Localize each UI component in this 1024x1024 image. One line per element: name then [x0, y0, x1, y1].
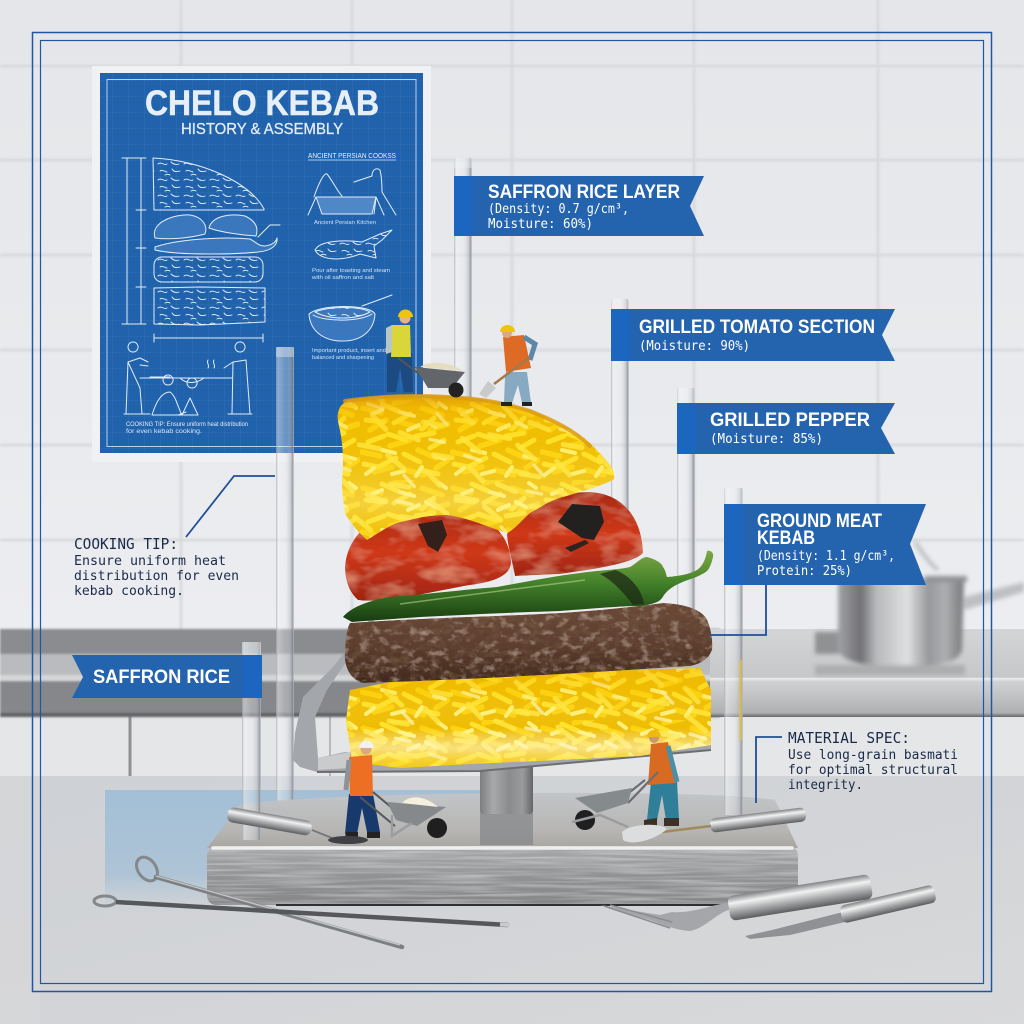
worker with wheelbarrow on base right — [572, 730, 679, 830]
worker with wheelbarrow on top rice — [386, 310, 465, 398]
ancient persian cooks sketches: ANCIENT PERSIAN COOKSS — [308, 151, 396, 160]
long skewer with ring diagonal — [132, 853, 402, 947]
cooking tip callout — [74, 535, 239, 599]
steel base platform — [207, 793, 798, 905]
ribbon: saffron rice layer: (Density: 0.7 g/cm³, — [488, 201, 629, 217]
glass measuring tube: rice layer — [454, 158, 472, 408]
cooking tip callout: Ensure uniform heat — [74, 553, 226, 569]
poster cooking tip caption: COOKING TIP: Ensure uniform heat distribution — [126, 421, 248, 428]
second skewer horizontal — [94, 896, 510, 925]
poster subtitle: HISTORY & ASSEMBLY — [181, 121, 343, 138]
cooking tip callout: COOKING TIP: — [74, 535, 178, 553]
tiled kitchen wall — [0, 0, 1024, 640]
blueprint poster: for even kebab cooking. — [126, 429, 202, 435]
ribbon: grilled tomato section — [611, 309, 895, 361]
ribbon: grilled pepper — [677, 403, 895, 454]
glass measuring tube: pepper — [677, 388, 695, 613]
ribbon: grilled tomato section: (Moisture: 90%) — [639, 338, 750, 354]
connector: cooking tip — [186, 476, 275, 537]
ribbon: ground meat kebab — [724, 504, 926, 585]
cooking tip callout: distribution for even — [74, 568, 239, 584]
ancient persian cooks sketches: with oil saffron and salt — [311, 275, 375, 281]
poster title: CHELO KEBAB — [145, 84, 379, 123]
grilled tomato right — [507, 492, 643, 576]
material spec callout: Use long-grain basmati — [788, 747, 958, 763]
ribbon: saffron rice layer: SAFFRON RICE LAYER — [488, 182, 680, 203]
bottom rice layer — [346, 668, 711, 768]
ribbon: ground meat kebab: KEBAB — [757, 528, 815, 549]
ribbon: grilled pepper: (Moisture: 85%) — [710, 431, 823, 447]
glass measuring tube: meat — [724, 488, 743, 815]
ribbon: grilled pepper: GRILLED PEPPER — [710, 410, 870, 431]
material spec callout: for optimal structural — [788, 762, 958, 778]
glass measuring tube: saffron rice — [242, 642, 261, 840]
ancient persian cooks sketches: Ancient Persian Kitchen — [314, 220, 376, 226]
cooking tip callout: kebab cooking. — [74, 583, 184, 599]
stainless pot in background — [815, 542, 1024, 675]
blueprint poster — [92, 66, 431, 462]
material spec callout — [756, 729, 958, 803]
steel counter band and lower cabinets — [0, 629, 1024, 778]
steel support post — [480, 762, 533, 814]
grilled tomato left — [345, 505, 511, 601]
ribbon: saffron rice layer: Moisture: 60%) — [488, 216, 593, 232]
ribbon: saffron rice — [72, 655, 262, 698]
material spec callout: integrity. — [788, 777, 863, 793]
sketch of cooks at table — [124, 342, 252, 415]
left spoon tool on base — [226, 807, 368, 844]
worker with wheelbarrow on base left — [345, 740, 447, 838]
glass measuring tube: left tall — [276, 347, 294, 817]
ground meat kebab layer — [345, 603, 712, 683]
worker with shovel on top rice — [479, 325, 535, 406]
ribbon: ground meat kebab: (Density: 1.1 g/cm³, — [757, 548, 895, 564]
blueprint of layered stack — [122, 158, 280, 342]
right spoon tool on base — [622, 807, 806, 842]
connector: ground meat kebab — [710, 585, 766, 635]
ribbon: ground meat kebab: GROUND MEAT — [757, 511, 882, 532]
ancient persian cooks sketches: Important product, insert and — [312, 348, 386, 354]
ancient persian cooks sketches: balanced and sharpening — [312, 355, 374, 361]
ribbon: saffron rice: SAFFRON RICE — [93, 667, 230, 688]
top saffron rice layer with crust — [338, 395, 614, 540]
fork — [600, 874, 873, 931]
ribbon: ground meat kebab: Protein: 25%) — [757, 563, 852, 579]
grilled pepper — [343, 551, 713, 622]
glass measuring tube: tomato — [611, 299, 629, 519]
ancient persian cooks sketches: Pour after toasting and steam — [312, 268, 390, 274]
steel table surface — [0, 776, 1024, 1024]
kebab tray and curved lifter — [293, 606, 711, 772]
ancient persian cooks sketches — [308, 151, 396, 361]
material spec callout: MATERIAL SPEC: — [788, 729, 910, 747]
ribbon: grilled tomato section: GRILLED TOMATO SECTION — [639, 317, 875, 338]
ribbon: saffron rice layer — [454, 176, 704, 236]
knife — [745, 884, 937, 939]
